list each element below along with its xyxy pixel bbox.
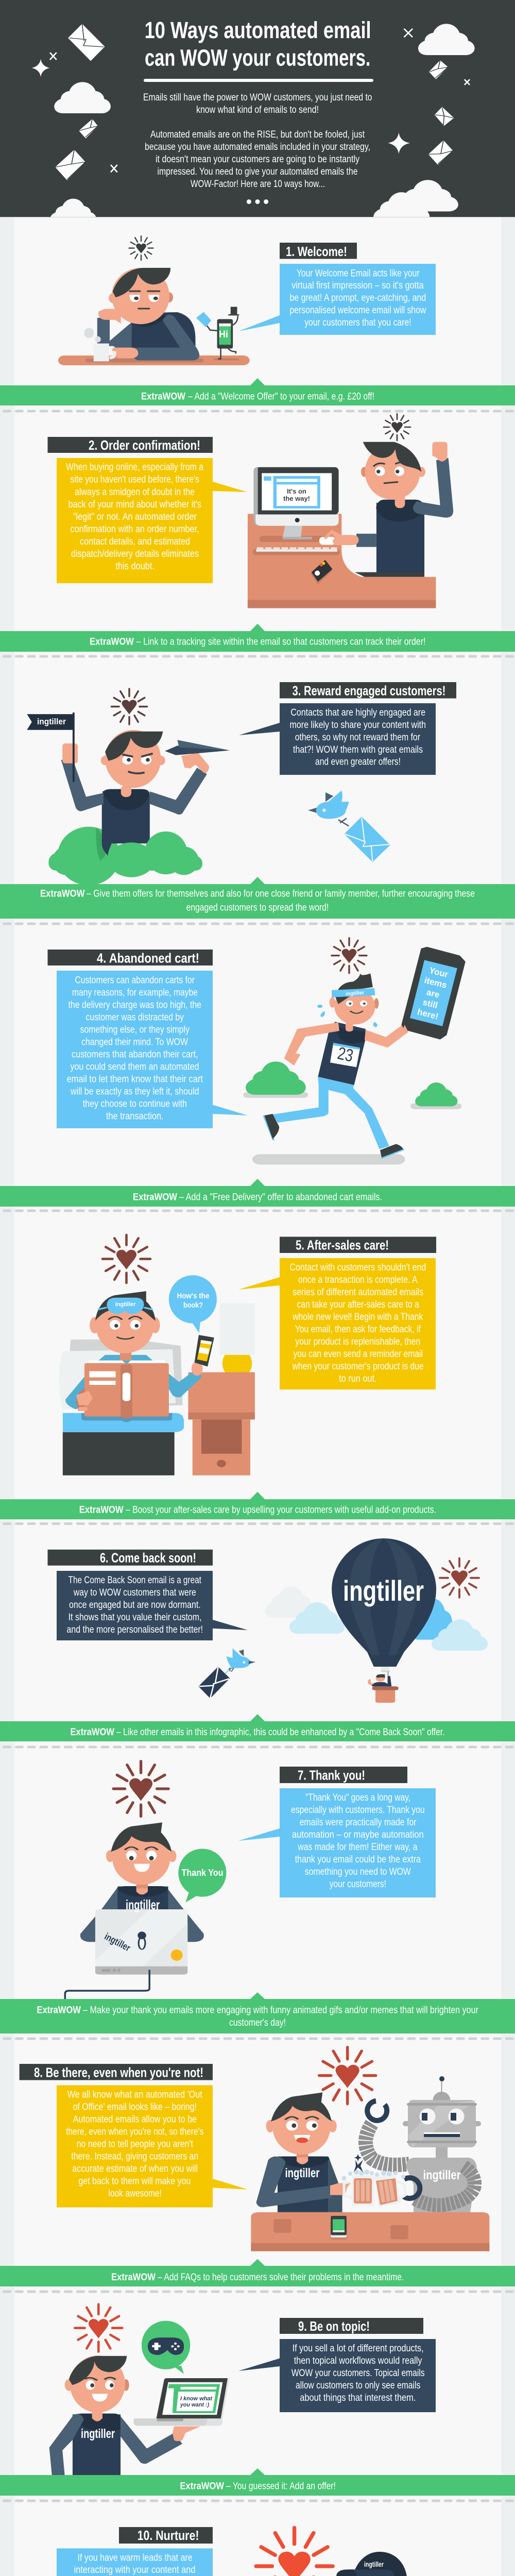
bar counter (251, 2212, 489, 2251)
heading: 4. Abandoned cart! (97, 950, 199, 965)
panel: 5 After-sales care: book? (183, 1301, 203, 1310)
callout: confirmation with an order number, (70, 524, 199, 535)
panel: 8 Be there even when you're not (0, 2047, 515, 2286)
title (145, 17, 371, 71)
icon: heart burst (75, 2304, 122, 2352)
panel: 4 Abandoned cart: 23 (336, 1043, 355, 1066)
callout: dispatch/delivery details eliminates (71, 549, 199, 560)
icon: heart burst (256, 2528, 333, 2576)
panel: 7 Thank you: ingtiller (102, 1931, 132, 1954)
phone message: here! (416, 1007, 439, 1022)
beer mugs (342, 2154, 406, 2207)
panel: 10 Nurture (0, 2527, 515, 2576)
callout: many reasons, for example, maybe (72, 987, 198, 998)
callout: the transaction. (106, 1111, 164, 1122)
callout (57, 2086, 248, 2207)
heading (47, 437, 213, 453)
heading: 5. After-sales care! (296, 1238, 389, 1253)
callout (57, 458, 247, 583)
panel: 8 Be there even when you're not: ingtiller (423, 2168, 461, 2182)
heading: 7. Thank you! (298, 1767, 365, 1783)
ExtraWOW band: ExtraWOW (90, 637, 134, 647)
heading (47, 1550, 213, 1566)
ExtraWOW band: ExtraWOW (70, 1727, 114, 1738)
callout: way to WOW customers that were (73, 1587, 196, 1598)
phone message (416, 965, 450, 1022)
title: can WOW your customers. (145, 44, 371, 71)
heading: 8. Be there, even when you're not! (34, 2065, 203, 2080)
intro text: impressed. You need to give your automated emails the (158, 166, 357, 177)
callout: customers that abandon their cart, (72, 1049, 198, 1060)
callout: something else, or they simply (80, 1024, 190, 1036)
callout: there, even when you're not, so there's (66, 2127, 203, 2137)
heading (280, 2318, 423, 2334)
ExtraWOW band: ExtraWOW (40, 888, 85, 900)
illustration: man in cap and sunglasses with thumbs up (286, 2552, 453, 2576)
callout (57, 1571, 248, 1640)
icon: heart burst (129, 236, 153, 260)
callout: once engaged but are now dormant. (69, 1600, 201, 1611)
callout: once a transaction is complete. A (298, 1275, 418, 1285)
callout: whole new level! Begin with a Thank (292, 1312, 423, 1323)
callout: that?! WOW them with great emails (293, 744, 423, 755)
callout: more likely to share your content with (289, 720, 426, 731)
ExtraWOW band (0, 378, 515, 405)
panel: 7 Thank you: Thank You (181, 1868, 224, 1878)
callout: You email, then ask for feedback, if (295, 1324, 421, 1335)
intro text (143, 92, 372, 190)
ExtraWOW band: customer's day! (229, 2018, 286, 2028)
heading: 9. Be on topic! (298, 2318, 370, 2334)
callout: Contact with customers shouldn't end (289, 1262, 426, 1273)
panel: 9 Be on topic: ingtiller (81, 2427, 115, 2441)
ExtraWOW band (0, 1714, 515, 1741)
ExtraWOW band (0, 1179, 515, 1207)
callout: personalised welcome email will show (289, 305, 426, 316)
callout: your product is replenishable, then (295, 1336, 420, 1347)
panel: 7 Thank you (0, 1761, 515, 2033)
callout (57, 971, 248, 1128)
balloon logo: ingtiller (343, 1574, 424, 1607)
panel: 3 Reward engaged customers (0, 682, 515, 919)
ExtraWOW band (0, 877, 515, 919)
callout: site you haven't used before, there's (70, 474, 199, 485)
illustration: runner with phone (244, 947, 466, 1164)
illustration: man holding laptop with game bubble (49, 2321, 229, 2475)
callout: emails were practically made for (300, 1817, 417, 1828)
callout (239, 703, 436, 775)
illustration: man at computer desk (248, 442, 453, 608)
icon: heart burst (102, 1235, 150, 1283)
panel: 9 Be on topic: you want :) (180, 2402, 209, 2408)
ExtraWOW band: – Add a "Free Delivery" offer to abandoned cart emails. (179, 1192, 382, 1202)
callout: they choose to continue with (83, 1098, 187, 1110)
callout: The Come Back Soon email is a great (68, 1575, 201, 1586)
intro text: WOW-Factor! Here are 10 ways how... (191, 179, 325, 190)
ExtraWOW band (0, 2468, 515, 2496)
callout: changed their mind. To WOW (81, 1037, 188, 1048)
callout (238, 2339, 436, 2412)
illustration: clouds and hot air balloon (198, 1538, 488, 1703)
heading: 10. Nurture! (138, 2528, 199, 2543)
heading: 6. Come back soon! (100, 1550, 196, 1565)
callout: can take your after-sales care to a (297, 1299, 419, 1310)
callout: be great! A prompt, eye-catching, and (289, 293, 426, 303)
ExtraWOW band: engaged customers to spread the word! (186, 903, 329, 913)
callout: when your customer's product is due (292, 1361, 424, 1372)
panel: 6 Come back soon (0, 1538, 515, 1741)
ExtraWOW band (0, 1992, 515, 2033)
ExtraWOW band (0, 1492, 515, 1519)
callout: "Thank You" goes a long way, (305, 1792, 410, 1803)
ExtraWOW band: – Add FAQs to help customers solve their problems in the meantime. (158, 2272, 404, 2283)
callout: will be exactly as they left it, should (70, 1086, 199, 1097)
callout (238, 264, 436, 335)
intro text: because you have automated emails included in your strategy, (145, 142, 370, 152)
callout: thank you email could be the extra (295, 1854, 421, 1865)
callout: customer was distracted by (85, 1012, 184, 1023)
callout: If you sell a lot of different products, (293, 2343, 424, 2354)
callout: the delivery charge was too high, the (68, 999, 201, 1011)
icon: heart burst (332, 938, 367, 973)
panel: 5 After-sales care (0, 1235, 515, 1519)
phone message: still (422, 997, 439, 1010)
heading (47, 950, 213, 965)
callout: to run out. (339, 1374, 377, 1384)
ExtraWOW band: ExtraWOW (133, 1192, 177, 1202)
ExtraWOW band: ExtraWOW (37, 2005, 81, 2015)
title: 10 Ways automated email (145, 17, 371, 43)
panel: 9 Be on topic: I know what (180, 2396, 213, 2402)
callout: interacting with your content and (74, 2565, 196, 2575)
ExtraWOW band: – Add a "Welcome Offer" to your email, e.g. £20 off! (188, 392, 374, 402)
callout: email to let them know that their cart (67, 1074, 203, 1085)
ExtraWOW band (0, 623, 515, 652)
callout: back of your mind about whether it's (68, 499, 201, 510)
callout: It shows that you value their custom, (68, 1612, 202, 1623)
panel: 1 Welcome: Hi (219, 329, 228, 340)
callout: automation – or maybe automation (292, 1829, 424, 1840)
callout: look awesome! (108, 2189, 162, 2199)
callout: Automated emails allow you to be (73, 2114, 197, 2125)
callout (238, 1258, 436, 1389)
callout: others, so why not reward them for (295, 732, 421, 743)
robot (366, 2076, 481, 2212)
ExtraWOW band: ExtraWOW (180, 2481, 224, 2492)
callout: virtual first impression – so it's gotta (291, 280, 424, 291)
callout: Your Welcome Email acts like your (297, 268, 420, 279)
callout: and even greater offers! (315, 756, 401, 768)
callout: no need to tell people you aren't (77, 2139, 194, 2149)
ExtraWOW band: ExtraWOW (79, 1504, 124, 1516)
callout: was made for them! Either way, a (298, 1842, 418, 1853)
illustration: man in bush with flag, paper plane and bird (27, 713, 390, 886)
ExtraWOW band: ExtraWOW (111, 2272, 156, 2283)
icon: heart burst (440, 1558, 479, 1598)
panel: 2 Order confirmation: the way! (283, 495, 310, 502)
panel: 4 Abandoned cart: ingtiller (346, 990, 365, 997)
heading: 3. Reward engaged customers! (293, 683, 445, 699)
callout: and the more personalised the better! (67, 1624, 203, 1635)
callout: your customers that you care! (304, 317, 411, 328)
callout: allow customers to only see emails (296, 2380, 420, 2391)
callout: your customers! (330, 1879, 386, 1890)
header icons: envelopes, clouds, sparkles (32, 24, 475, 224)
callout: of Office' email looks like – boring! (73, 2102, 197, 2112)
illustration: robot and man clinking beers (251, 2076, 489, 2251)
ExtraWOW band (0, 2259, 515, 2286)
panel: header (0, 0, 515, 224)
panel: 5 After-sales care: ingtiller (115, 1301, 136, 1308)
illustration: man with mug and phone (58, 268, 250, 365)
callout: always a smidgen of doubt in the (75, 487, 195, 498)
callout: accurate estimate of when you will (72, 2164, 198, 2174)
man (256, 2092, 351, 2212)
callout: Customers can abandon carts for (75, 975, 195, 986)
callout: then topical workflows would really (294, 2355, 422, 2366)
callout: about things that interest them. (300, 2393, 416, 2403)
panel: 2 Order confirmation: It's on (287, 487, 306, 495)
panel: 3 Reward engaged customers: ingtiller (37, 717, 66, 726)
callout: We all know what an automated 'Out (67, 2090, 202, 2100)
ExtraWOW band: – Link to a tracking site within the email so that customers can track their order! (136, 637, 425, 647)
illustration: smiling man with laptop (65, 1822, 226, 2000)
heading: 1. Welcome! (286, 244, 347, 259)
ExtraWOW band: – Boost your after-sales care by upselling your customers with useful add-on products. (126, 1504, 436, 1516)
ellipsis dots (247, 199, 268, 204)
intro text: Automated emails are on the RISE, but don't be fooled, just (150, 129, 365, 140)
callout (238, 1788, 436, 1897)
illustration: man reading in bed (59, 1275, 255, 1476)
icon: heart burst (113, 1761, 168, 1817)
phone message: items (423, 975, 448, 990)
intro text: it doesn't mean your customers are going to be instantly (156, 154, 359, 165)
callout: you could send them an automated (70, 1061, 199, 1073)
ExtraWOW band: ExtraWOW (141, 392, 185, 402)
callout: something you need to WOW (305, 1867, 411, 1877)
intro text: know what kind of emails to send! (196, 105, 319, 115)
callout: If you have warm leads that are (77, 2552, 193, 2564)
callout: get back to them will make you (78, 2176, 191, 2187)
icon: heart burst (111, 689, 147, 724)
callout: contact details, and estimated (80, 536, 190, 547)
panel: 5 After-sales care: How's the (177, 1292, 209, 1300)
heading (280, 1767, 407, 1783)
callout: especially with customers. Thank you (291, 1805, 425, 1816)
callout: Contacts that are highly engaged are (290, 707, 425, 718)
intro text: Emails still have the power to WOW customers, you just need to (143, 92, 372, 103)
panel: 7 Thank you: ingtiller (126, 1897, 160, 1912)
callout: this doubt. (115, 561, 154, 572)
panel: 10 Nurture: ingtiller (364, 2560, 384, 2568)
callout (57, 2548, 248, 2576)
ExtraWOW band: – You guessed it: Add an offer! (226, 2481, 336, 2492)
icon: heart burst (319, 2047, 376, 2104)
phone message: are (425, 987, 441, 1000)
panel: 2 Order confirmation (0, 414, 515, 652)
callout: you can even send a reminder email (294, 1349, 423, 1360)
icon: heart burst (384, 414, 410, 440)
callout: When buying online, especially from a (66, 462, 203, 473)
callout: series of different automated emails (293, 1287, 423, 1298)
phone message: Your (428, 965, 450, 979)
panel: 4 Abandoned cart (0, 938, 515, 1207)
callout: WOW your customers. Topical emails (291, 2368, 425, 2379)
panel: 1 Welcome (0, 236, 515, 405)
callout: there. Instead, giving customers an (71, 2151, 198, 2162)
panel: 8 Be there even when you're not: ingtiller (285, 2166, 320, 2180)
callout: "legit" or not. An automated order (73, 512, 197, 522)
heading: 2. Order confirmation! (89, 437, 200, 453)
ExtraWOW band: – Like other emails in this infographic, this could be enhanced by a "Come Back Soon" offer. (116, 1727, 445, 1738)
panel: 9 Be on topic (0, 2304, 515, 2496)
